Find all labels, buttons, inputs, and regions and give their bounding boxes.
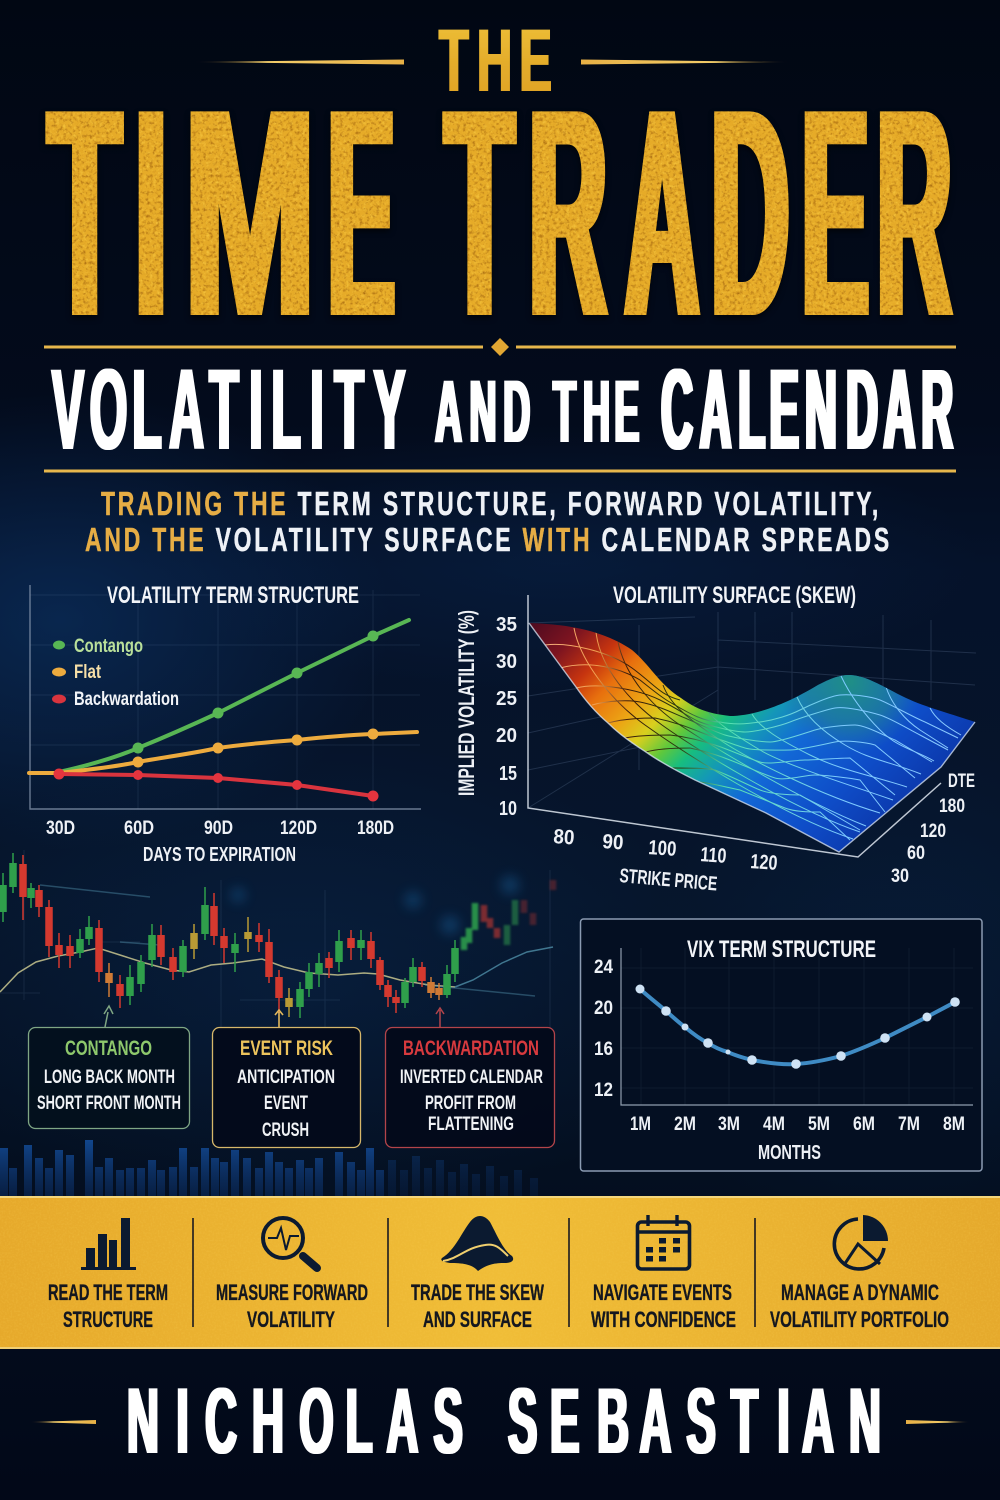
callout: event risk: EVENT xyxy=(264,1092,308,1114)
y axis tick labels: 25 xyxy=(496,687,517,710)
TIME TRADER heading xyxy=(0,65,1000,385)
DTE axis labels: 180 xyxy=(939,795,965,817)
y axis tick labels: 30 xyxy=(496,650,517,673)
icon: volatility skew hat xyxy=(441,1216,513,1271)
y axis title: IMPLIED VOLATILITY (%) xyxy=(454,610,479,796)
blurred background lights xyxy=(231,876,519,934)
olive and orange candles xyxy=(109,917,439,1017)
chart title: VOLATILITY SURFACE (SKEW) xyxy=(613,582,856,609)
strike axis tick labels: 80 xyxy=(553,825,575,849)
panel: VIX term structure chart xyxy=(580,919,982,1171)
tagline xyxy=(85,485,892,558)
x axis labels: 4M xyxy=(763,1114,785,1135)
callout: contango xyxy=(28,1028,190,1128)
author name: NICHOLAS SEBASTIAN xyxy=(127,1369,881,1473)
strike axis title: STRIKE PRICE xyxy=(619,865,718,896)
VOLATILITY: VOLATILITY xyxy=(52,345,406,474)
icon: magnifier with pulse xyxy=(263,1218,317,1268)
DTE axis labels: DTE xyxy=(948,770,975,792)
y axis tick labels: 35 xyxy=(496,613,517,636)
DTE axis labels: 120 xyxy=(920,820,946,842)
left author rule xyxy=(30,1420,96,1424)
VIX curve xyxy=(636,984,960,1069)
x axis title: DAYS TO EXPIRATION xyxy=(143,843,296,866)
backwardation line xyxy=(54,768,378,802)
panel: candlestick chart xyxy=(0,850,553,1196)
strike axis tick labels: 110 xyxy=(700,843,727,868)
surface mesh xyxy=(530,623,975,852)
back wall grid xyxy=(528,612,976,808)
callout: backwardation xyxy=(386,1028,554,1148)
y axis tick labels: 20 xyxy=(496,724,517,747)
x axis tick labels: 90D xyxy=(204,818,233,839)
subtitle: volatility and the calendar xyxy=(52,345,953,474)
icon: calendar xyxy=(637,1215,690,1269)
callout: contango: CONTANGO xyxy=(65,1037,152,1060)
x axis labels: 1M xyxy=(630,1114,651,1135)
arrow: backwardation pointer xyxy=(436,1008,444,1027)
CALENDAR: CALENDAR xyxy=(661,346,953,474)
tagline line 2: AND THE VOLATILITY SURFACE WITH CALENDAR SPREADS xyxy=(85,521,892,558)
left rule beside THE xyxy=(194,60,404,64)
banner labels: AND SURFACE xyxy=(423,1307,532,1332)
right rule beside THE xyxy=(581,60,789,64)
faded candles at right xyxy=(464,880,553,950)
contango line xyxy=(59,620,409,772)
surface edge highlight xyxy=(529,623,975,852)
chart grid xyxy=(621,948,973,1105)
chart title: VOLATILITY TERM STRUCTURE xyxy=(107,582,359,609)
axes xyxy=(528,595,941,857)
banner labels: NAVIGATE EVENTS xyxy=(593,1280,732,1305)
x axis tick labels: 120D xyxy=(280,818,317,839)
banner labels: MEASURE FORWARD xyxy=(216,1280,368,1305)
upper divider with diamond xyxy=(44,338,956,356)
red candles xyxy=(23,855,422,1013)
chart grid xyxy=(30,590,420,809)
x axis tick labels xyxy=(46,818,394,839)
green candles xyxy=(3,853,455,1018)
banner labels xyxy=(48,1280,949,1332)
chart axes xyxy=(621,948,973,1105)
y axis tick labels: 10 xyxy=(499,797,517,820)
volume bars xyxy=(4,1140,534,1196)
x axis labels xyxy=(630,1114,965,1135)
y axis labels: 12 xyxy=(594,1079,613,1101)
strike axis tick labels: 120 xyxy=(750,850,778,875)
callout: event risk: EVENT RISK xyxy=(240,1037,333,1060)
price grid lines xyxy=(0,850,550,1030)
callout: backwardation: BACKWARDATION xyxy=(403,1037,539,1060)
chart legend: Flat xyxy=(74,662,102,683)
arrow: event risk pointer xyxy=(275,1010,283,1027)
x axis labels: 2M xyxy=(674,1114,696,1135)
x axis tick labels: 180D xyxy=(357,818,394,839)
moving average lines xyxy=(0,885,553,996)
x axis labels: 3M xyxy=(718,1114,740,1135)
y axis labels: 16 xyxy=(594,1038,613,1060)
banner labels: TRADE THE SKEW xyxy=(411,1280,544,1305)
flat line xyxy=(29,728,417,773)
right author rule xyxy=(906,1420,970,1424)
DTE axis labels: 30 xyxy=(891,865,909,887)
chart title: VIX TERM STRUCTURE xyxy=(687,936,876,963)
panel: gold benefits banner xyxy=(0,1196,1000,1349)
banner labels: WITH CONFIDENCE xyxy=(591,1307,736,1332)
callout: backwardation: PROFIT FROM xyxy=(425,1092,516,1114)
x axis title: MONTHS xyxy=(758,1142,821,1164)
callout: event risk: ANTICIPATION xyxy=(237,1066,335,1088)
x axis labels: 7M xyxy=(898,1114,920,1135)
callout: backwardation: INVERTED CALENDAR xyxy=(400,1066,543,1088)
y axis labels xyxy=(594,956,613,1101)
y axis tick labels xyxy=(496,613,517,820)
callout: event risk xyxy=(212,1028,360,1148)
callout: backwardation: FLATTENING xyxy=(428,1113,514,1135)
x axis labels: 8M xyxy=(943,1114,965,1135)
banner dividers xyxy=(193,1218,755,1327)
chart legend xyxy=(52,636,179,710)
THE heading: THE xyxy=(439,12,552,111)
y axis tick labels: 15 xyxy=(499,762,517,785)
title block xyxy=(0,12,1000,385)
callout: contango: LONG BACK MONTH xyxy=(44,1066,175,1088)
x axis labels: 6M xyxy=(853,1114,875,1135)
banner labels: STRUCTURE xyxy=(63,1307,153,1332)
panel: volatility surface chart xyxy=(454,582,985,896)
callout: contango: SHORT FRONT MONTH xyxy=(37,1092,181,1114)
x axis tick labels: 60D xyxy=(124,818,154,839)
strike axis tick labels xyxy=(553,825,778,875)
chart legend: Backwardation xyxy=(74,689,179,710)
author block xyxy=(30,1369,970,1473)
icon: portfolio pie xyxy=(834,1215,888,1269)
AND THE: AND THE xyxy=(435,362,639,462)
y axis labels: 24 xyxy=(594,956,613,978)
strike axis tick labels: 90 xyxy=(602,830,624,854)
DTE axis labels xyxy=(891,770,975,887)
strike axis tick labels: 100 xyxy=(648,836,677,861)
arrow: contango pointer xyxy=(104,1006,113,1027)
callout: event risk: CRUSH xyxy=(262,1119,309,1141)
chart axes xyxy=(30,585,421,809)
DTE axis labels: 60 xyxy=(907,842,925,864)
x axis tick labels: 30D xyxy=(46,818,75,839)
lower divider xyxy=(44,470,956,472)
x axis labels: 5M xyxy=(808,1114,830,1135)
panel: volatility term structure chart xyxy=(29,582,421,866)
icon: bar chart xyxy=(81,1218,136,1270)
banner labels: READ THE TERM xyxy=(48,1280,168,1305)
banner labels: VOLATILITY xyxy=(247,1307,335,1332)
y axis labels: 20 xyxy=(594,997,613,1019)
chart legend: Contango xyxy=(74,636,143,657)
